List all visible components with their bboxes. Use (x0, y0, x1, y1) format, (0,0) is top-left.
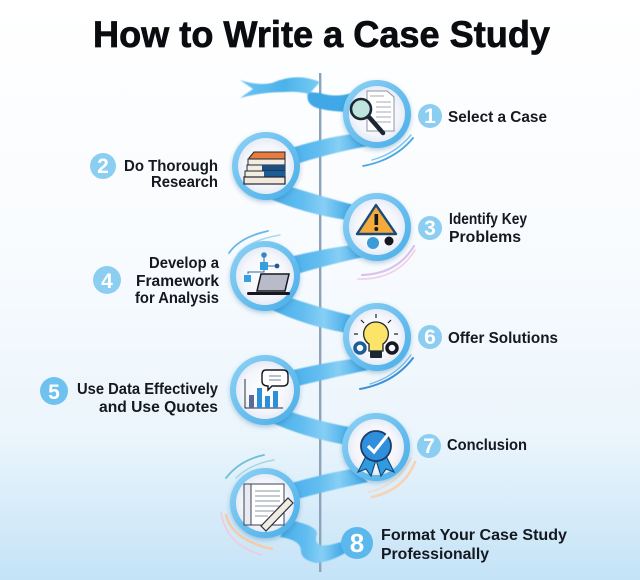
step 5 label (77, 381, 218, 416)
step 2 label: Do Thorough (124, 158, 218, 175)
step 4 icon circle (230, 241, 300, 311)
step 3 badge: 3 (424, 217, 436, 240)
central vertical line (319, 73, 321, 572)
step 5 label: and Use Quotes (99, 399, 218, 416)
step 5 label: Use Data Effectively (77, 381, 218, 398)
step 8 badge (341, 527, 373, 559)
step 7 (342, 413, 527, 481)
step 8 label (381, 527, 567, 563)
step 7 badge (417, 434, 441, 458)
step 3 badge (418, 216, 442, 240)
step 2 (90, 132, 300, 200)
step 7 badge: 7 (423, 435, 435, 458)
step 6 icon circle (343, 303, 411, 371)
step 7 label: Conclusion (447, 437, 527, 454)
step 4 badge (93, 266, 121, 294)
step 7 icon circle (342, 413, 410, 481)
step 3 label: Identify Key (449, 211, 527, 228)
step 4 label: Framework (136, 273, 219, 290)
step 4 label: Develop a (149, 255, 219, 272)
step 6 label: Offer Solutions (448, 330, 558, 347)
step 8 label: Professionally (381, 546, 489, 563)
step 5 badge: 5 (48, 381, 60, 404)
step 5 icon circle (230, 355, 300, 425)
swoosh accents (221, 135, 415, 555)
step 2 label (124, 158, 218, 191)
step 2 icon circle (232, 132, 300, 200)
step 5 (40, 355, 300, 425)
step 1 (343, 80, 547, 148)
step 2 label: Research (151, 174, 218, 191)
step 6 badge: 6 (424, 326, 436, 349)
step 1 icon circle (343, 80, 411, 148)
step 6 (343, 303, 558, 371)
step 1 label: Select a Case (448, 109, 547, 126)
step 2 badge (90, 153, 116, 179)
ribbon connectors (268, 134, 368, 563)
step 1 badge (418, 104, 442, 128)
step 8 icon circle (230, 468, 300, 538)
step 2 badge: 2 (97, 155, 109, 178)
title: How to Write a Case Study (93, 14, 550, 55)
ribbon banner top (240, 77, 352, 112)
step 4 label: for Analysis (135, 290, 219, 307)
step 4 (93, 241, 300, 311)
step 8 label: Format Your Case Study (381, 527, 567, 544)
step 3 label (449, 211, 527, 246)
step 8 (230, 468, 567, 563)
step 5 badge (40, 377, 68, 405)
step 4 badge: 4 (101, 270, 113, 293)
step 1 badge: 1 (424, 105, 436, 128)
step 3 (343, 193, 527, 261)
step 4 label (135, 255, 219, 307)
step 3 label: Problems (449, 229, 521, 246)
step 8 badge: 8 (350, 528, 364, 558)
step 6 badge (418, 325, 442, 349)
step 3 icon circle (343, 193, 411, 261)
